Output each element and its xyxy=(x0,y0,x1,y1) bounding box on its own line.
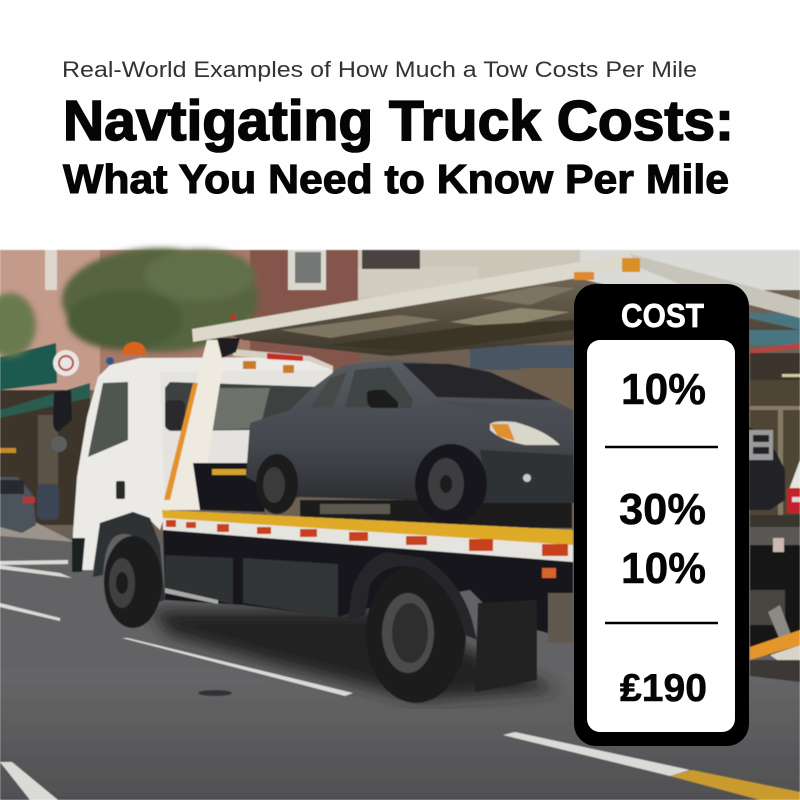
truck chassis xyxy=(163,528,573,640)
toolbox xyxy=(165,555,338,618)
values card xyxy=(587,340,735,732)
wheels xyxy=(93,512,573,703)
truck cab xyxy=(51,342,333,572)
parked car xyxy=(0,477,36,533)
subtitle: Real-World Examples of How Much a Tow Costs Per Mile xyxy=(62,57,697,82)
subheading: What You Need to Know Per Mile xyxy=(63,156,729,202)
manhole xyxy=(198,690,232,696)
truck shadow xyxy=(150,610,560,700)
pedestrians xyxy=(37,484,59,520)
panel: cost xyxy=(574,284,749,746)
road sign xyxy=(53,350,79,376)
beacon xyxy=(122,342,146,355)
tilt arm xyxy=(163,338,265,512)
car on flatbed xyxy=(246,360,800,524)
flatbed deck raised xyxy=(192,254,800,356)
front of car right of panel xyxy=(749,427,785,510)
value: 10% second: 10% xyxy=(621,544,706,593)
trees xyxy=(0,248,258,357)
rear machinery xyxy=(750,515,800,682)
value: 10%: 10% xyxy=(621,365,706,414)
road xyxy=(0,535,800,800)
panel background xyxy=(574,284,749,746)
value: 30%: 30% xyxy=(619,485,706,534)
street background: buildings xyxy=(0,250,800,550)
value: £190: ₤190 xyxy=(620,667,707,710)
photo: tow truck on a city street xyxy=(0,248,800,800)
road markings xyxy=(0,560,690,800)
flatbed side rail xyxy=(162,510,573,578)
items under car on bed xyxy=(300,500,572,528)
panel heading: COST xyxy=(621,297,704,334)
front fender xyxy=(93,512,165,605)
header background xyxy=(0,0,800,250)
title: Navtigating Truck Costs: xyxy=(63,89,734,153)
